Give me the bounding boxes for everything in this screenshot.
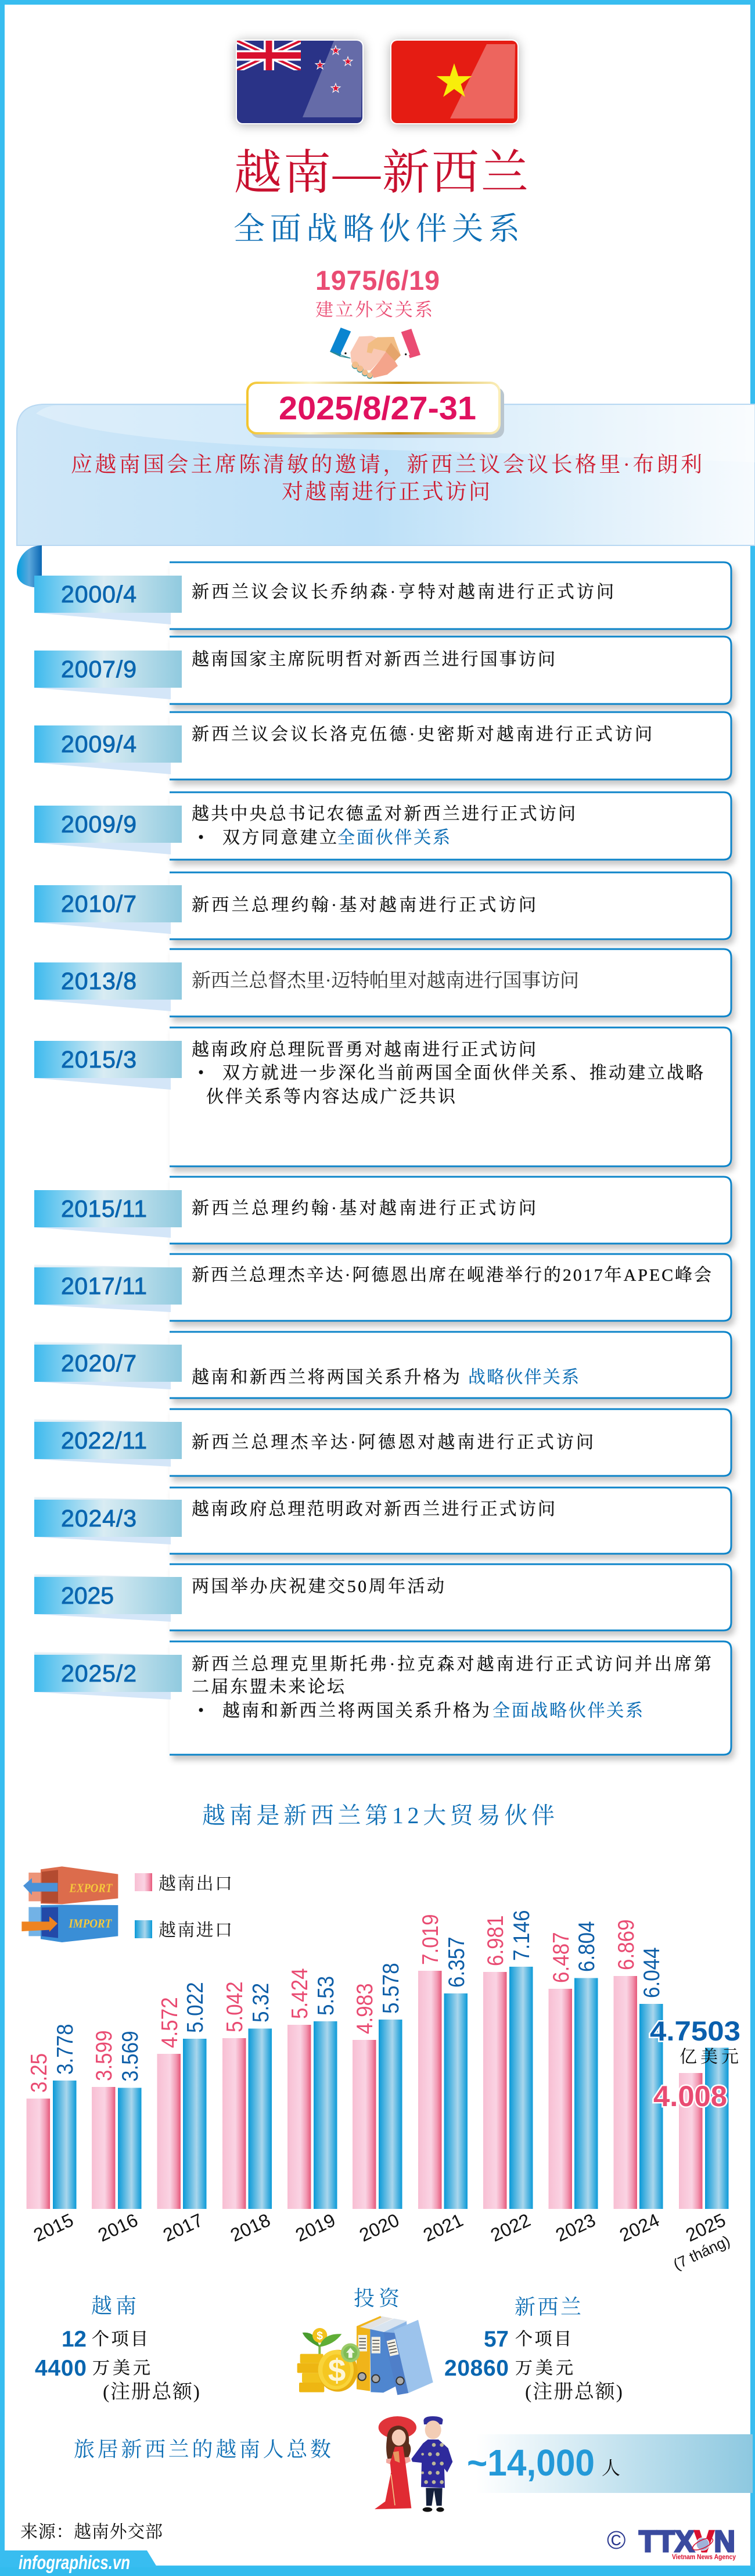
timeline card 2009/9: 2009/9 bbox=[61, 811, 136, 838]
year axis: 2016 bbox=[95, 2209, 141, 2246]
timeline card 2020/7: 战略伙伴关系 bbox=[468, 1368, 579, 1387]
timeline card 2009/4 bbox=[34, 712, 731, 779]
bar value labels: 3.569 bbox=[117, 2031, 142, 2082]
diplomatic relations caption: 建立外交关系 bbox=[315, 300, 433, 320]
icon: Vietnam flag bbox=[390, 39, 519, 124]
timeline card 2000/4: 新西兰议会议长乔纳森·亨特对越南进行正式访问 bbox=[192, 583, 614, 602]
timeline card 2015/3 bbox=[34, 1027, 731, 1166]
timeline card 2017/11: 2017/11 bbox=[61, 1273, 147, 1299]
timeline card 2015/11: 新西兰总理约翰·基对越南进行正式访问 bbox=[192, 1199, 536, 1218]
timeline card 2015/3: 双方就进一步深化当前两国全面伙伴关系、推动建立战略 bbox=[222, 1064, 703, 1083]
panel: visit banner bbox=[17, 404, 755, 588]
bar value labels: 3.25 bbox=[26, 2053, 51, 2093]
timeline card 2020/7 bbox=[34, 1332, 731, 1398]
timeline card 2015/3: 伙伴关系等内容达成广泛共识 bbox=[206, 1087, 456, 1106]
year axis: (7 tháng) bbox=[670, 2232, 733, 2273]
panel: Vietnam investment bbox=[35, 2294, 200, 2403]
bar value labels: 4.983 bbox=[351, 1983, 377, 2034]
bar value labels: 3.599 bbox=[91, 2030, 116, 2081]
timeline card 2025/2: 二届东盟未来论坛 bbox=[192, 1677, 345, 1697]
timeline card 2024/3: 2024/3 bbox=[61, 1505, 136, 1532]
timeline card 2025/2 bbox=[34, 1641, 731, 1755]
timeline card 2025: 两国举办庆祝建交50周年活动 bbox=[192, 1577, 444, 1596]
timeline card 2010/7: 2010/7 bbox=[61, 890, 136, 917]
bar value labels: 6.487 bbox=[548, 1932, 573, 1983]
timeline card 2022/11 bbox=[34, 1409, 731, 1476]
legend: import: 越南进口 bbox=[159, 1921, 232, 1940]
bar value labels: 6.357 bbox=[443, 1937, 469, 1988]
residents value: ~14,000 bbox=[467, 2442, 595, 2484]
banner text line 1: 应越南国会主席陈清敏的邀请，新西兰议会议长格里·布朗利 bbox=[71, 452, 702, 477]
panel: New Zealand investment: 20860 bbox=[444, 2356, 509, 2381]
year axis: 2022 bbox=[487, 2209, 534, 2246]
date of diplomatic relations: 1975/6/19 bbox=[315, 265, 440, 296]
year axis: 2015 bbox=[30, 2209, 77, 2246]
timeline card 2020/7: 2020/7 bbox=[61, 1350, 136, 1377]
bar value labels: 5.042 bbox=[221, 1981, 247, 2032]
timeline card 2022/11: 新西兰总理杰辛达·阿德恩对越南进行正式访问 bbox=[192, 1433, 594, 1452]
timeline card 2025: 2025 bbox=[61, 1582, 114, 1609]
bar value labels: 5.022 bbox=[182, 1982, 207, 2033]
panel: Vietnam investment: 12 bbox=[62, 2327, 87, 2352]
timeline card 2015/3: 越南政府总理阮晋勇对越南进行正式访问 bbox=[192, 1040, 536, 1059]
bar value labels: 6.804 bbox=[573, 1921, 599, 1972]
timeline card 2009/9: 越共中央总书记农德孟对新西兰进行正式访问 bbox=[192, 804, 576, 824]
timeline card 2009/4: 2009/4 bbox=[61, 731, 136, 757]
timeline card 2007/9 bbox=[34, 637, 731, 704]
residents unit: 人 bbox=[602, 2458, 620, 2478]
timeline card 2009/9: 全面伙伴关系 bbox=[337, 828, 450, 847]
date badge bbox=[247, 383, 504, 438]
timeline card 2010/7: 新西兰总理约翰·基对越南进行正式访问 bbox=[192, 896, 536, 915]
timeline card 2007/9: 2007/9 bbox=[61, 656, 136, 682]
timeline card 2007/9: 越南国家主席阮明哲对新西兰进行国事访问 bbox=[192, 650, 555, 669]
bar value labels: 3.778 bbox=[52, 2024, 77, 2075]
subtitle: 全面战略伙伴关系 bbox=[233, 211, 520, 246]
year axis: 2021 bbox=[420, 2209, 466, 2246]
timeline card 2009/4: 新西兰议会议长洛克伍德·史密斯对越南进行正式访问 bbox=[192, 725, 652, 744]
unit: 亿美元 bbox=[680, 2047, 739, 2067]
panel: New Zealand investment bbox=[444, 2295, 623, 2403]
icon: New Zealand flag bbox=[236, 39, 364, 124]
panel: Vietnam investment: (注册总额) bbox=[103, 2381, 200, 2403]
timeline card 2025 bbox=[34, 1564, 731, 1630]
timeline card 2025/2: 新西兰总理克里斯托弗·拉克森对越南进行正式访问并出席第 bbox=[192, 1655, 711, 1674]
bar value labels: 7.146 bbox=[508, 1910, 534, 1961]
timeline card 2015/3: 2015/3 bbox=[61, 1046, 136, 1073]
investment heading: 投资 bbox=[354, 2287, 400, 2310]
title: 越南—新西兰 bbox=[234, 146, 528, 199]
icon: coins and binders: $ bbox=[317, 2330, 323, 2342]
timeline card 2025/2: 越南和新西兰将两国关系升格为 bbox=[222, 1701, 490, 1720]
timeline card 2024/3: 越南政府总理范明政对新西兰进行正式访问 bbox=[192, 1500, 555, 1519]
year axis: 2019 bbox=[292, 2209, 339, 2246]
icon: coins and binders bbox=[297, 2316, 433, 2395]
timeline card 2000/4: 2000/4 bbox=[61, 581, 136, 608]
timeline card 2017/11 bbox=[34, 1254, 731, 1321]
panel: New Zealand investment: 57 bbox=[484, 2327, 509, 2352]
gradient band: residents count bbox=[476, 2434, 753, 2493]
highlight value 2025 export: 4.008 bbox=[653, 2080, 727, 2112]
panel: New Zealand investment: 万美元 bbox=[515, 2359, 573, 2378]
bar value labels bbox=[26, 1910, 664, 2093]
timeline card 2000/4 bbox=[34, 562, 731, 629]
timeline card 2010/7 bbox=[34, 872, 731, 939]
bar value labels: 6.869 bbox=[613, 1919, 638, 1970]
panel: Vietnam investment: 个项目 bbox=[92, 2330, 148, 2349]
bar value labels: 7.019 bbox=[417, 1914, 443, 1965]
year axis bbox=[30, 2209, 733, 2273]
footer tab: infographics.vn bbox=[0, 2550, 755, 2573]
bar value labels: 5.578 bbox=[378, 1963, 403, 2014]
year axis: 2017 bbox=[160, 2209, 206, 2246]
icon: export import containers bbox=[21, 1866, 118, 1942]
highlight value 2025 import: 4.7503 bbox=[650, 2015, 740, 2046]
timeline card 2013/8: 新西兰总督杰里·迈特帕里对越南进行国事访问 bbox=[192, 970, 579, 991]
trade heading: 越南是新西兰第12大贸易伙伴 bbox=[202, 1802, 555, 1828]
banner text line 2: 对越南进行正式访问 bbox=[282, 480, 490, 504]
timeline card 2024/3 bbox=[34, 1488, 731, 1554]
panel: Vietnam investment: 越南 bbox=[91, 2294, 136, 2318]
timeline card 2022/11: 2022/11 bbox=[61, 1427, 147, 1454]
icon: handshake bbox=[330, 328, 420, 379]
timeline card 2009/9: 双方同意建立 bbox=[222, 828, 337, 847]
legend: export: 越南出口 bbox=[159, 1874, 232, 1894]
timeline card 2020/7: 越南和新西兰将两国关系升格为 bbox=[192, 1368, 460, 1387]
timeline card 2009/9 bbox=[34, 792, 731, 860]
bar value labels: 6.044 bbox=[638, 1947, 664, 1998]
timeline card 2017/11: 新西兰总理杰辛达·阿德恩出席在岘港举行的2017年APEC峰会 bbox=[192, 1266, 711, 1285]
bar value labels: 5.53 bbox=[312, 1976, 338, 2015]
logo: TTXVN: TTXVN bbox=[639, 2525, 735, 2559]
panel: Vietnam investment: 4400 bbox=[35, 2356, 87, 2381]
icon: coins and binders: $ bbox=[328, 2352, 346, 2388]
year axis: 2023 bbox=[552, 2209, 599, 2246]
timeline card 2013/8 bbox=[34, 949, 731, 1016]
panel: New Zealand investment: 个项目 bbox=[515, 2330, 571, 2349]
date badge: 2025/8/27-31 bbox=[279, 390, 476, 427]
timeline card 2015/11 bbox=[34, 1177, 731, 1244]
timeline card 2025/2: 全面战略伙伴关系 bbox=[492, 1701, 643, 1720]
bar value labels: 6.981 bbox=[482, 1915, 508, 1966]
ribbon fold bbox=[17, 545, 42, 588]
footer tab: infographics.vn: infographics.vn bbox=[19, 2552, 130, 2573]
icon: export import containers: IMPORT bbox=[68, 1917, 113, 1930]
icon: export import containers: EXPORT bbox=[69, 1882, 113, 1895]
bar value labels: 5.424 bbox=[286, 1968, 312, 2019]
year axis: 2025 bbox=[682, 2209, 729, 2246]
bar value labels: 5.32 bbox=[247, 1983, 273, 2022]
logo: TTXVN: © bbox=[607, 2526, 625, 2555]
year axis: 2020 bbox=[356, 2209, 402, 2246]
panel: New Zealand investment: 新西兰 bbox=[515, 2295, 581, 2319]
source: 来源：越南外交部 bbox=[20, 2523, 163, 2542]
icon: couple in ao dai bbox=[375, 2416, 452, 2512]
panel: New Zealand investment: (注册总额) bbox=[525, 2381, 623, 2403]
year axis: 2018 bbox=[227, 2209, 274, 2246]
timeline card 2015/11: 2015/11 bbox=[61, 1195, 147, 1222]
residents label: 旅居新西兰的越南人总数 bbox=[74, 2438, 331, 2461]
timeline card 2025/2: 2025/2 bbox=[61, 1660, 136, 1687]
logo: TTXVN: Vietnam News Agency bbox=[672, 2553, 736, 2561]
year axis: 2024 bbox=[616, 2209, 663, 2246]
bar chart: trade 2015-2025 bbox=[26, 1910, 740, 2273]
timeline card 2013/8: 2013/8 bbox=[61, 968, 136, 994]
panel: Vietnam investment: 万美元 bbox=[92, 2359, 150, 2378]
bar value labels: 4.572 bbox=[156, 1997, 182, 2048]
